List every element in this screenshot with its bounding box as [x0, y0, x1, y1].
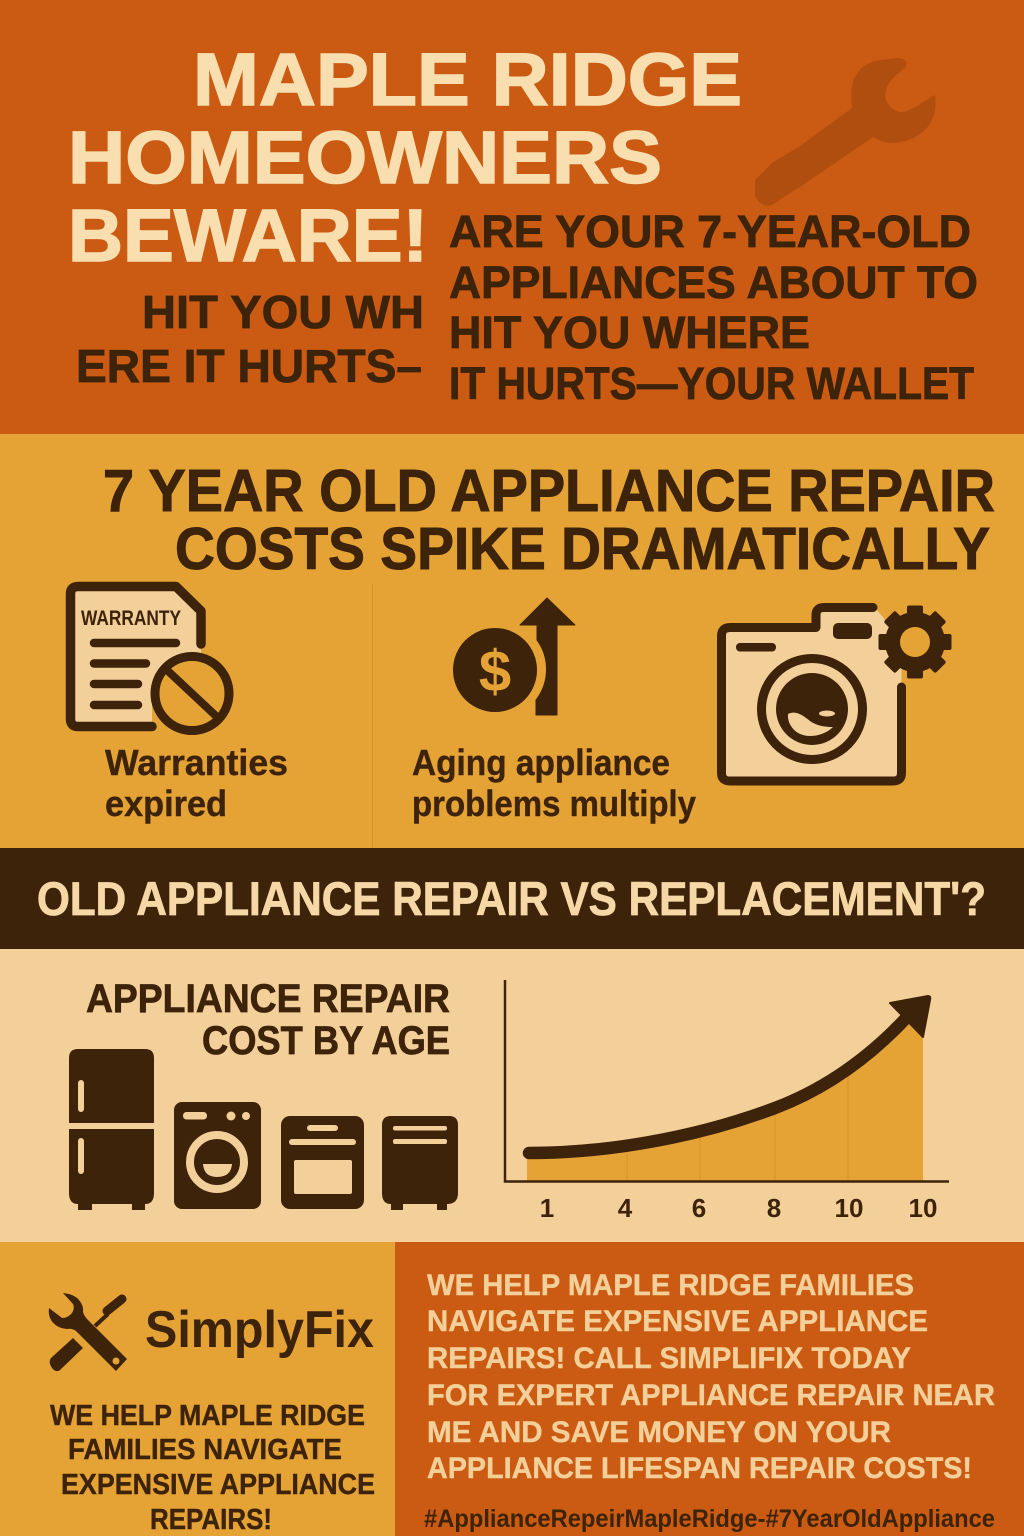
call to action text: REPAIRS! CALL SIMPLIFIX TODAY — [427, 1342, 911, 1375]
call to action text: FOR EXPERT APPLIANCE REPAIR NEAR — [427, 1379, 995, 1412]
section heading: COSTS SPIKE DRAMATICALLY — [175, 516, 990, 582]
main title: MAPLE RIDGE — [193, 38, 742, 121]
axis labels: 10 — [909, 1193, 937, 1223]
call to action text: ME AND SAVE MONEY ON YOUR — [427, 1416, 891, 1449]
main title: HOMEOWNERS — [68, 116, 662, 199]
call to action text: APPLIANCE LIFESPAN REPAIR COSTS! — [427, 1452, 972, 1485]
left subheading — [76, 286, 424, 392]
axis labels: 10 — [835, 1193, 863, 1223]
axis labels: 8 — [767, 1193, 781, 1223]
arrow: rising cost — [529, 996, 930, 1153]
label: warranties expired: expired — [105, 783, 227, 824]
right subheading: IT HURTS—YOUR WALLET — [449, 358, 974, 409]
banner: repair vs replacement — [0, 848, 1024, 949]
icon: crossed wrench and screwdriver — [49, 1293, 127, 1371]
chart heading: COST BY AGE — [202, 1019, 450, 1063]
call to action text: WE HELP MAPLE RIDGE FAMILIES — [427, 1269, 914, 1302]
icon: background wrench — [755, 58, 936, 206]
brand name: SimplyFix — [145, 1301, 374, 1359]
panel: repair cost by age — [0, 949, 1024, 1242]
right subheading — [449, 206, 978, 409]
right subheading: HIT YOU WHERE — [449, 307, 810, 358]
panel: SimplyFix brand — [0, 1242, 395, 1536]
section heading — [103, 458, 995, 582]
left subheading: HIT YOU WH — [142, 286, 424, 338]
section heading: 7 YEAR OLD APPLIANCE REPAIR — [103, 458, 995, 524]
right subheading: APPLIANCES ABOUT TO — [449, 257, 978, 308]
area under curve — [527, 1016, 923, 1181]
brand tagline: FAMILIES NAVIGATE — [68, 1434, 342, 1466]
icon: washing machine — [174, 1102, 261, 1209]
label: aging appliance problems — [412, 742, 696, 824]
icon: rising dollar cost — [453, 598, 575, 715]
icon: expired warranty document — [70, 586, 229, 730]
hashtags: #ApplianceRepeirMapleRidge-#7YearOldAppliance — [424, 1505, 995, 1533]
panel: header warning — [0, 0, 1024, 434]
left subheading: ERE IT HURTS– — [76, 340, 422, 392]
axis labels: 6 — [692, 1193, 706, 1223]
icon: washing machine with gear — [722, 606, 952, 781]
label: warranties expired: Warranties — [105, 742, 288, 783]
brand tagline: WE HELP MAPLE RIDGE — [50, 1400, 365, 1432]
axis labels: 1 — [540, 1193, 554, 1223]
brand tagline: EXPENSIVE APPLIANCE — [61, 1469, 375, 1501]
icon: dishwasher — [382, 1116, 458, 1210]
icon: gear — [878, 606, 952, 678]
icon: expired warranty document: WARRANTY — [81, 607, 181, 630]
brand tagline: REPAIRS! — [150, 1504, 272, 1536]
call to action text — [427, 1269, 995, 1485]
chart: repair cost curve — [505, 980, 949, 1223]
label: warranties expired — [105, 742, 288, 824]
main title: BEWARE! — [68, 194, 428, 277]
call to action text: NAVIGATE EXPENSIVE APPLIANCE — [427, 1305, 928, 1338]
panel: repair costs spike — [0, 434, 1024, 848]
icon: rising dollar cost: $ — [479, 639, 511, 704]
chart heading — [86, 977, 450, 1063]
brand tagline — [50, 1400, 375, 1536]
chart heading: APPLIANCE REPAIR — [86, 977, 450, 1021]
icon: oven — [281, 1116, 364, 1209]
axis labels: 4 — [618, 1193, 633, 1223]
right subheading: ARE YOUR 7-YEAR-OLD — [449, 206, 971, 257]
label: aging appliance problems: Aging appliance — [412, 742, 670, 783]
icon: refrigerator — [69, 1049, 154, 1210]
panel: call to action — [395, 1242, 1024, 1536]
axis labels — [540, 1193, 937, 1223]
main title — [68, 38, 742, 277]
label: aging appliance problems: problems multiply — [412, 783, 696, 824]
